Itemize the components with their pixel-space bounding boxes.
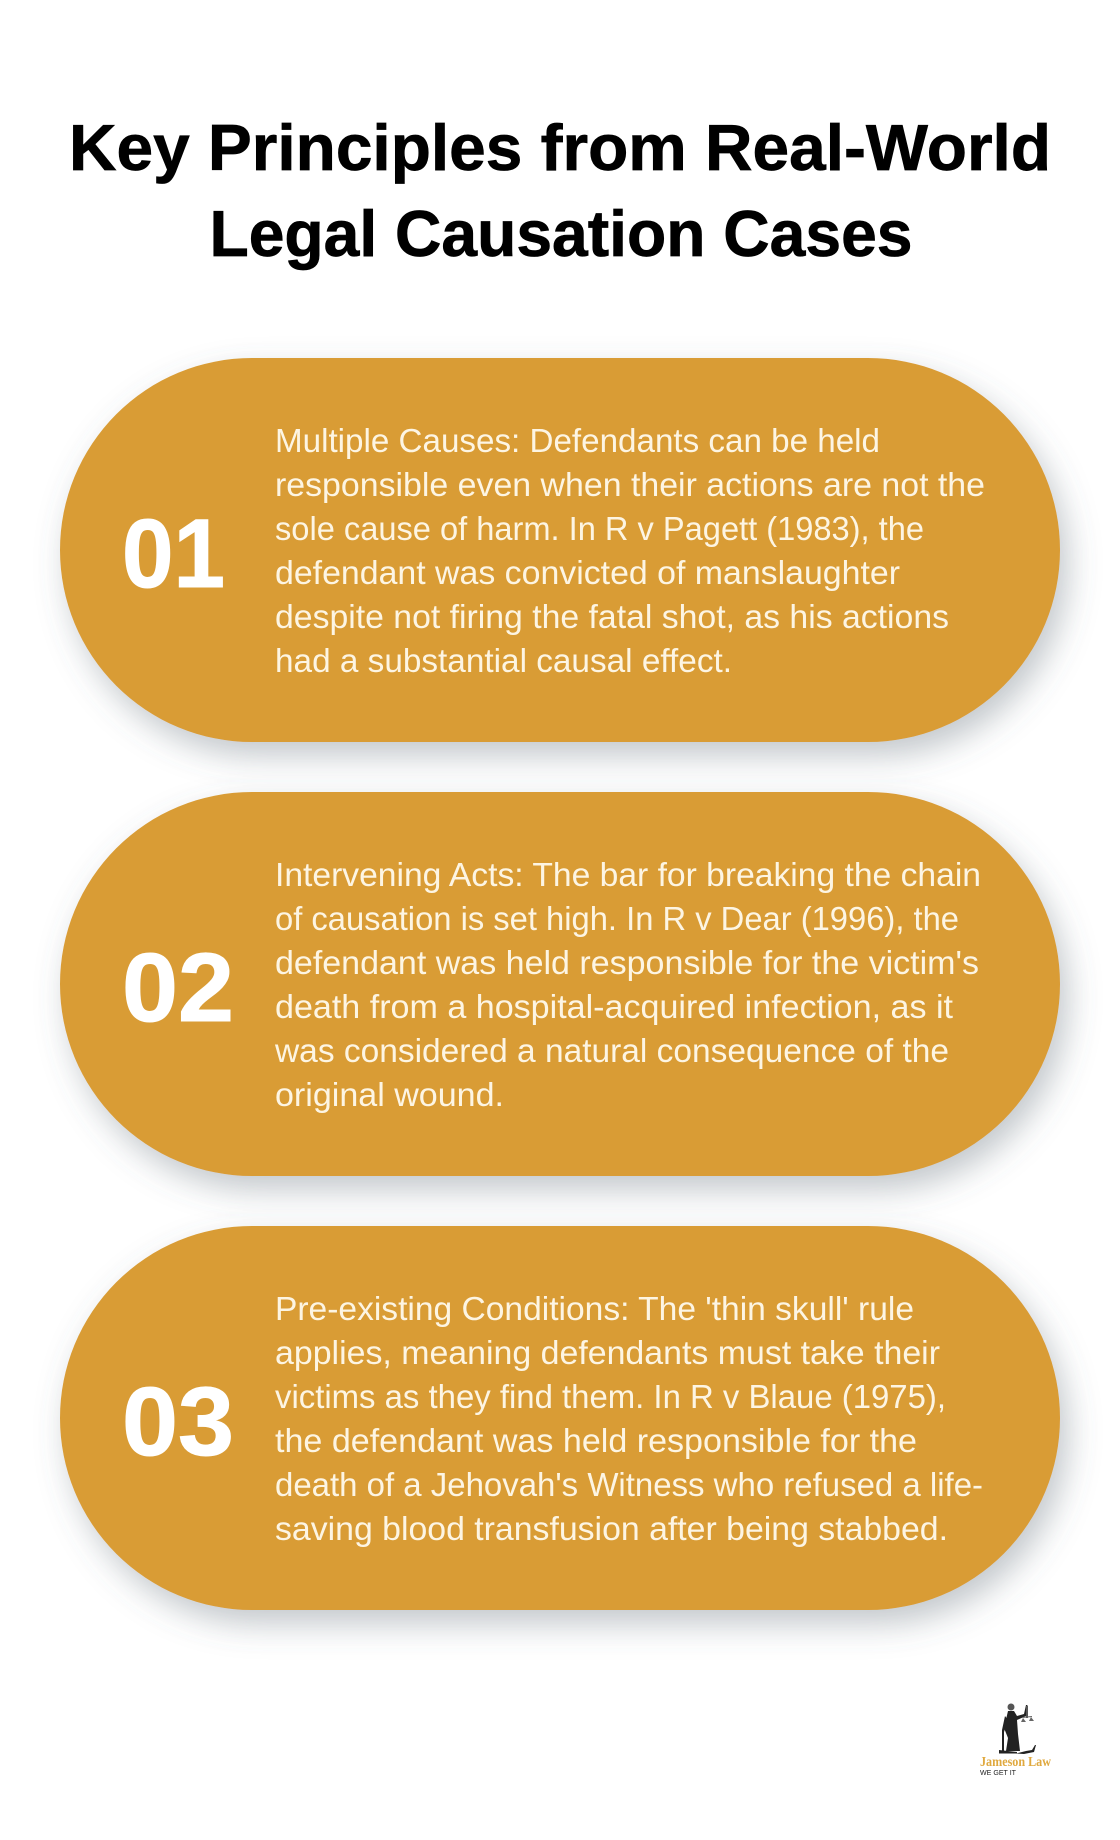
text block: pre-existing conditions: applies, meaning defendants must take their: [275, 1334, 940, 1371]
title: [69, 111, 1051, 270]
logo tagline: WE GET IT: [980, 1768, 1016, 1777]
text block: multiple causes: Multiple Causes: Defendants can be held: [275, 422, 880, 459]
text block: intervening acts: original wound.: [275, 1076, 504, 1113]
text block: multiple causes: sole cause of harm. In R v Pagett (1983), the: [275, 510, 924, 547]
text block: pre-existing conditions: death of a Jehovah's Witness who refused a life-: [275, 1466, 983, 1503]
logo name: Jameson Law: [980, 1754, 1051, 1769]
number 02: 02: [122, 933, 234, 1042]
title: Legal Causation Cases: [210, 197, 912, 270]
text block: multiple causes: despite not firing the fatal shot, as his actions: [275, 598, 949, 635]
text block: pre-existing conditions: [275, 1290, 983, 1547]
number 01: 01: [122, 499, 225, 608]
panel: 03 pre-existing conditions: [60, 1226, 1060, 1610]
text block: intervening acts: was considered a natural consequence of the: [274, 1032, 949, 1069]
text block: pre-existing conditions: Pre-existing Conditions: The 'thin skull' rule: [275, 1290, 914, 1327]
text block: pre-existing conditions: the defendant was held responsible for the: [275, 1422, 917, 1459]
text block: multiple causes: defendant was convicted of manslaughter: [275, 554, 900, 591]
text block: intervening acts: defendant was held responsible for the victim's: [275, 944, 979, 981]
text block: pre-existing conditions: victims as they find them. In R v Blaue (1975),: [275, 1378, 946, 1415]
text block: multiple causes: [275, 422, 985, 679]
title: Key Principles from Real-World: [69, 111, 1051, 184]
text block: intervening acts: Intervening Acts: The bar for breaking the chain: [275, 856, 981, 893]
text block: intervening acts: [274, 856, 981, 1113]
text block: pre-existing conditions: saving blood transfusion after being stabbed.: [275, 1510, 948, 1547]
logo: Jameson Law: [980, 1704, 1051, 1777]
text block: intervening acts: death from a hospital-acquired infection, as it: [275, 988, 953, 1025]
icon: lady justice: [999, 1704, 1036, 1754]
panel: 02 intervening acts: [60, 792, 1060, 1176]
panel: 01 multiple causes: [60, 358, 1060, 742]
text block: multiple causes: had a substantial causal effect.: [275, 642, 732, 679]
text block: intervening acts: of causation is set high. In R v Dear (1996), the: [275, 900, 959, 937]
text block: multiple causes: responsible even when their actions are not the: [275, 466, 985, 503]
number 03: 03: [122, 1367, 234, 1476]
